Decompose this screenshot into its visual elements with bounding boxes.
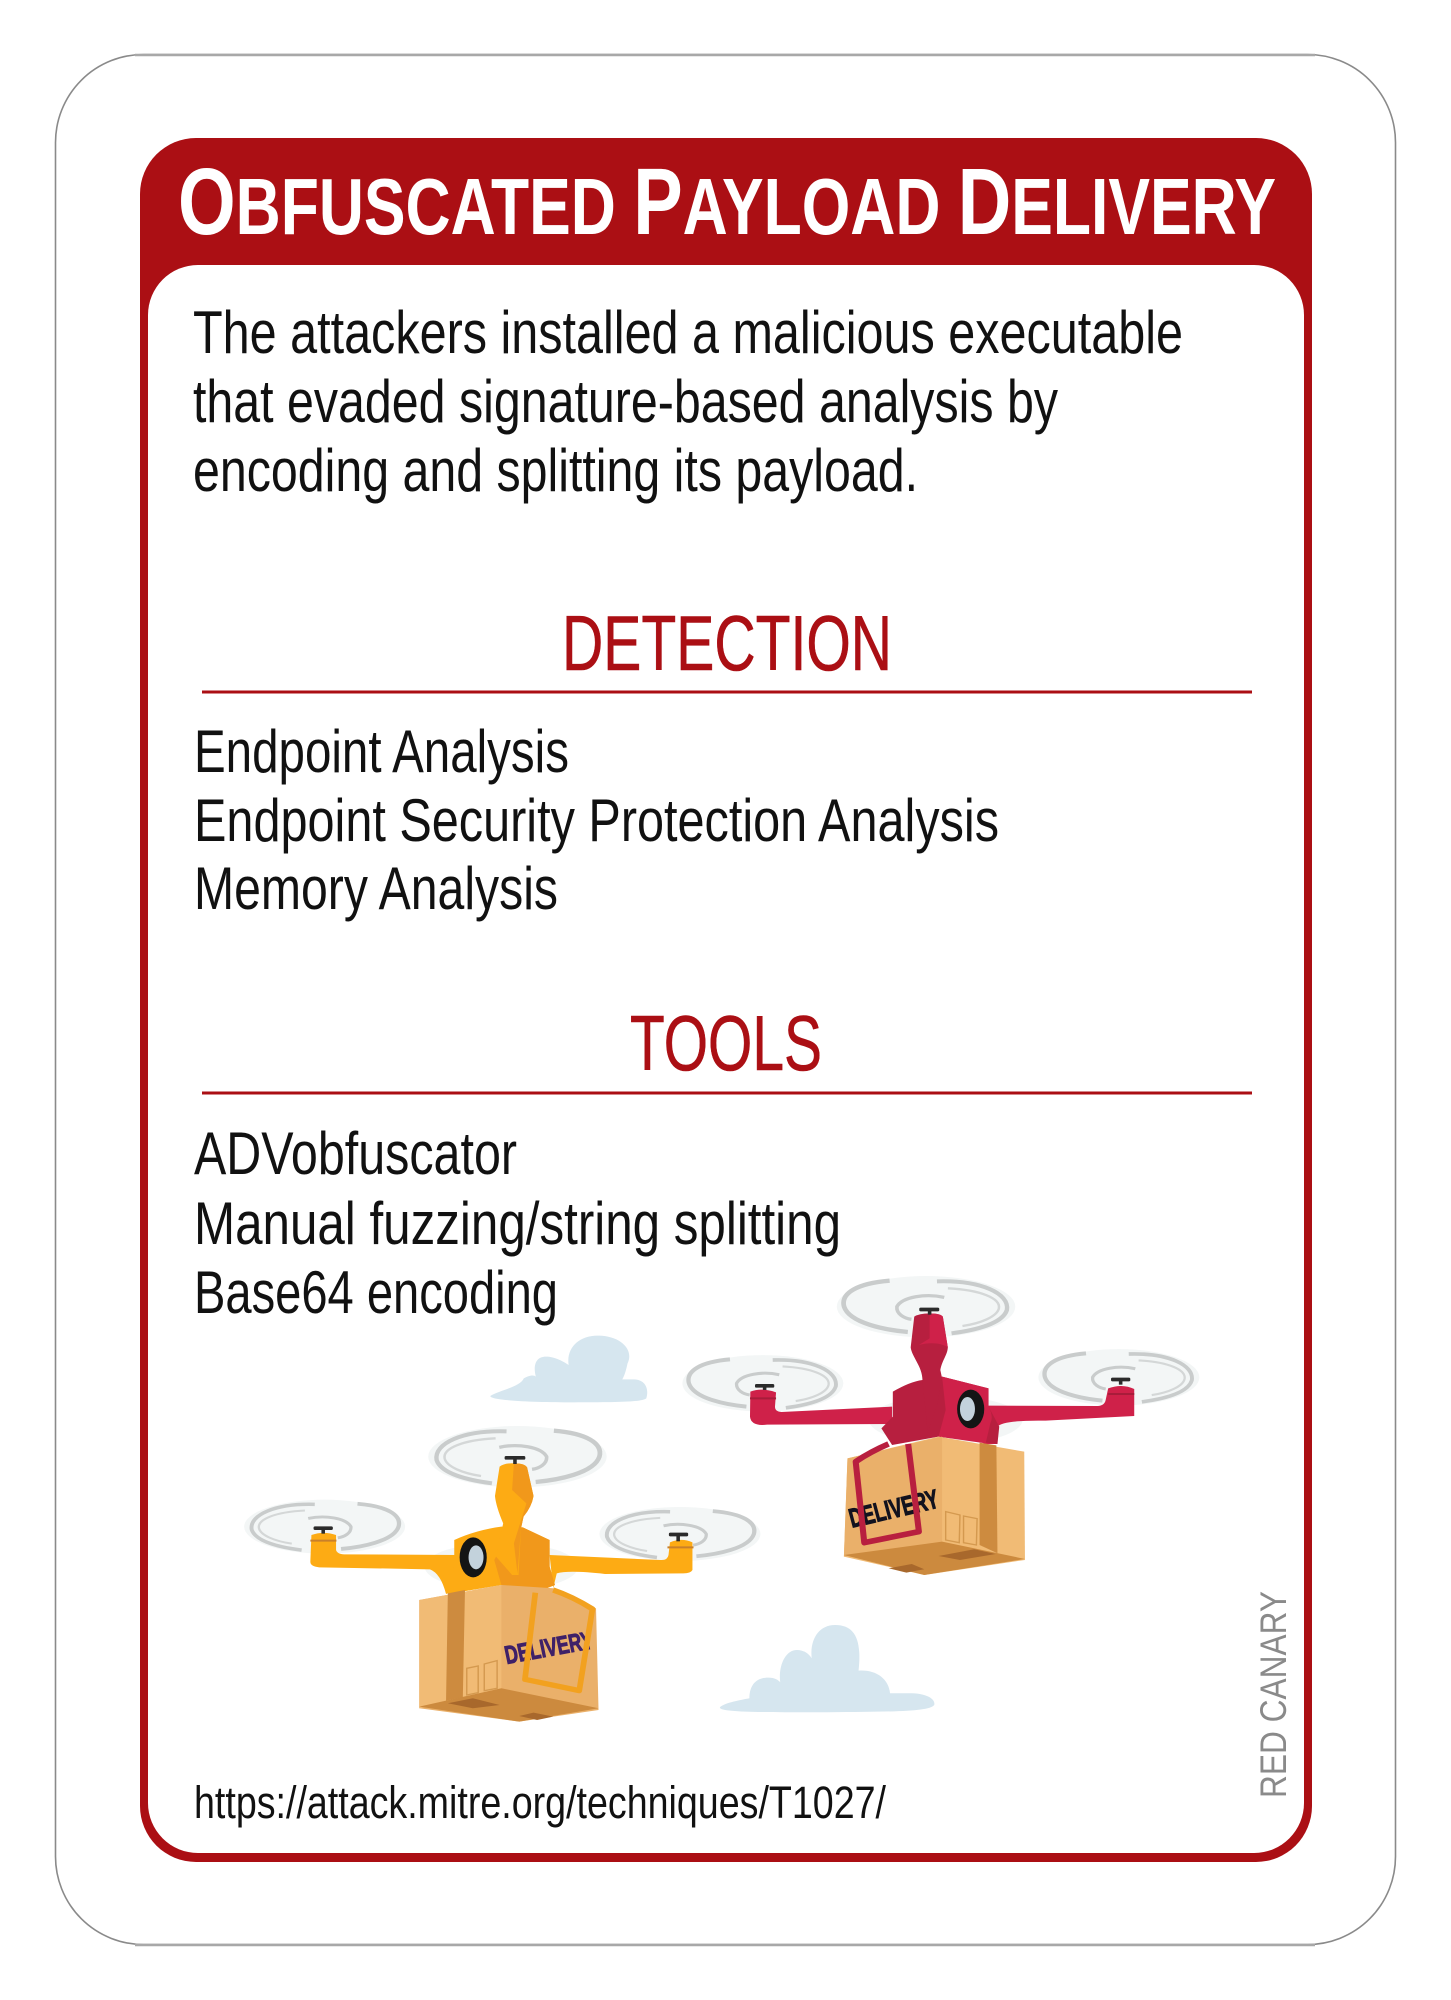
- source url: https://attack.mitre.org/techniques/T1027/: [194, 1777, 886, 1828]
- box: [844, 1437, 1025, 1575]
- heading: tools: [202, 999, 1252, 1094]
- heading: detection: DETECTION: [562, 599, 892, 687]
- icon: orange delivery drone: [244, 1426, 760, 1722]
- detection list: [194, 718, 999, 922]
- detection list: Memory Analysis: [194, 855, 558, 922]
- tools list: Manual fuzzing/string splitting: [194, 1190, 841, 1257]
- icon: red delivery drone: [682, 1276, 1199, 1575]
- red card panel: [140, 138, 1312, 1862]
- description text: [193, 299, 1183, 504]
- clouds: [490, 1336, 934, 1712]
- icon: orange delivery drone: DELIVERY: [502, 1625, 596, 1670]
- box: [419, 1585, 599, 1722]
- description text: encoding and splitting its payload.: [193, 437, 918, 504]
- detection list: Endpoint Analysis: [194, 718, 569, 785]
- icon: red delivery drone: DELIVERY: [846, 1484, 942, 1533]
- tools list: Base64 encoding: [194, 1259, 558, 1326]
- heading: detection: [202, 599, 1252, 694]
- detection list: Endpoint Security Protection Analysis: [194, 787, 999, 854]
- description text: that evaded signature-based analysis by: [193, 368, 1058, 435]
- description text: The attackers installed a malicious executable: [193, 299, 1183, 366]
- vertical credit: RED CANARY: [1253, 1591, 1294, 1798]
- heading: tools: TOOLS: [630, 999, 822, 1087]
- tools list: ADVobfuscator: [194, 1120, 517, 1187]
- tools list: [194, 1120, 841, 1326]
- title: OBFUSCATED PAYLOAD DELIVERY: [178, 149, 1276, 255]
